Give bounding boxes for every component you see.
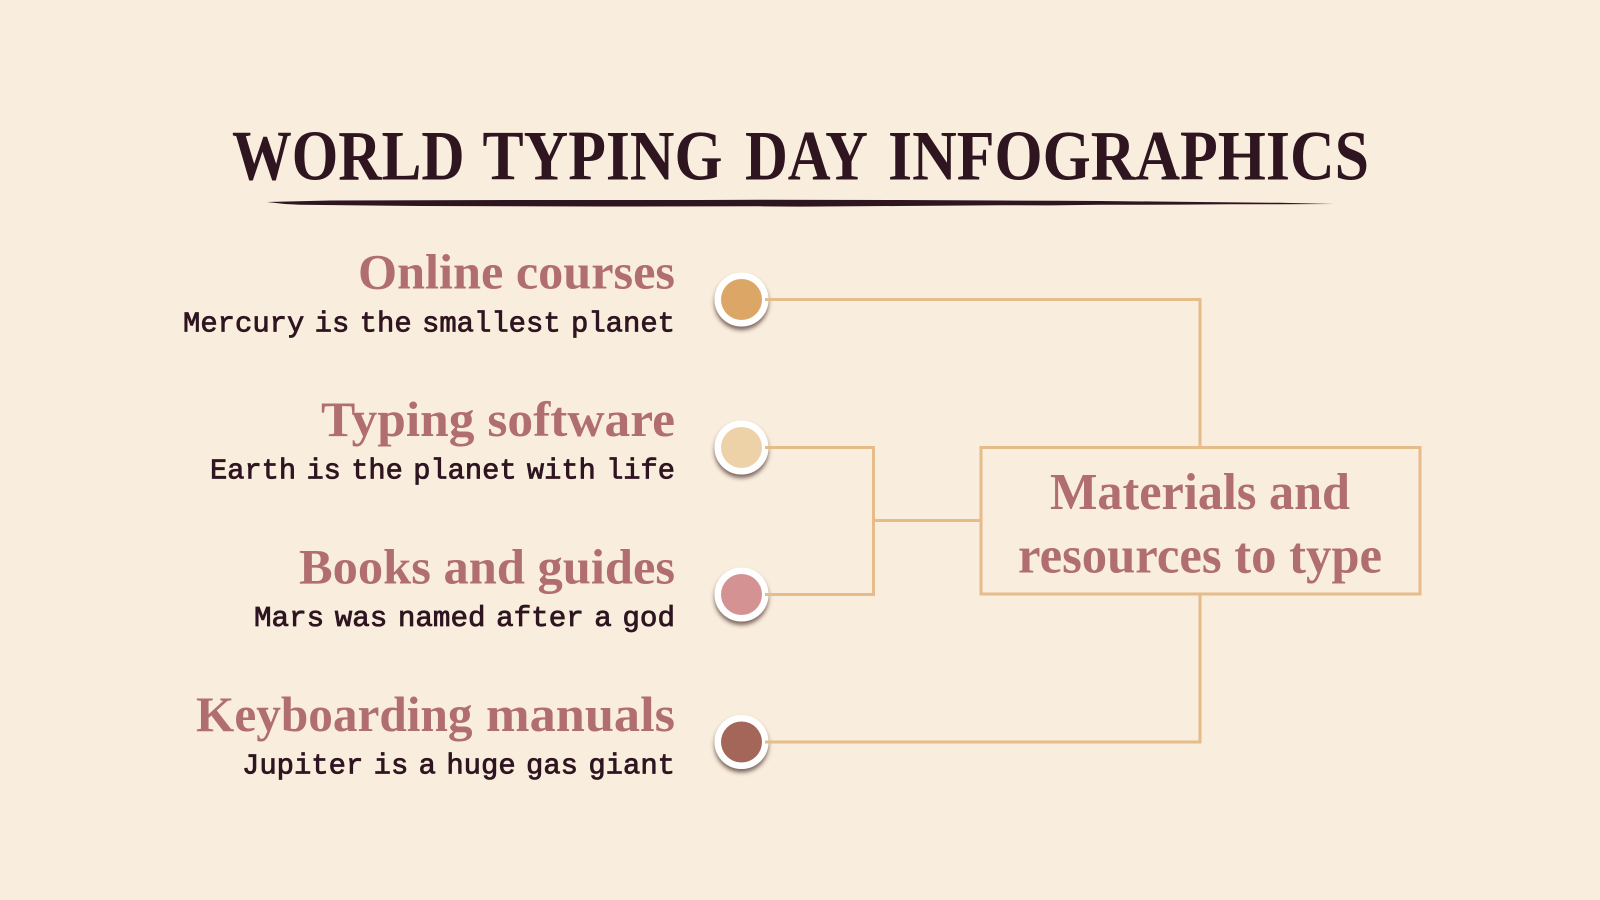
title: TYPING [482, 118, 722, 196]
box text line 1: Materials and [1050, 464, 1350, 521]
marker 4 [714, 715, 768, 769]
connector: online courses to box [765, 300, 1200, 447]
marker 3 [714, 568, 768, 622]
marker 2 [714, 420, 768, 474]
description 3: Mars was named after a god [254, 602, 675, 635]
heading 4: manuals [486, 686, 675, 742]
box text line 2: resources to type [1018, 528, 1382, 584]
connector stubs over markers [765, 300, 775, 742]
connector: keyboarding manuals to box [765, 594, 1200, 742]
heading 3: Books and guides [299, 538, 675, 594]
title: INFOGRAPHICS [888, 118, 1369, 196]
heading 1: Online courses [358, 244, 675, 300]
item 3: books and guides [254, 538, 675, 635]
heading 4 [196, 686, 675, 742]
marker 1 [714, 272, 768, 326]
title underline brush stroke [267, 200, 1334, 207]
heading 2: Typing software [321, 391, 675, 447]
connector: typing software and books to box [765, 448, 981, 594]
item 4: keyboarding manuals [196, 686, 675, 782]
description 4: Jupiter is a huge gas giant [242, 750, 675, 782]
item 2: typing software [210, 391, 675, 488]
title [232, 118, 1369, 196]
central box: materials and resources [981, 448, 1420, 594]
connector lines [765, 300, 1200, 742]
description 2: Earth is the planet with life [210, 454, 675, 488]
heading 4: Keyboarding [196, 686, 472, 742]
description 1: Mercury is the smallest planet [183, 308, 675, 340]
item 1: online courses [183, 244, 675, 340]
title: DAY [745, 118, 868, 196]
title: WORLD [232, 118, 464, 196]
